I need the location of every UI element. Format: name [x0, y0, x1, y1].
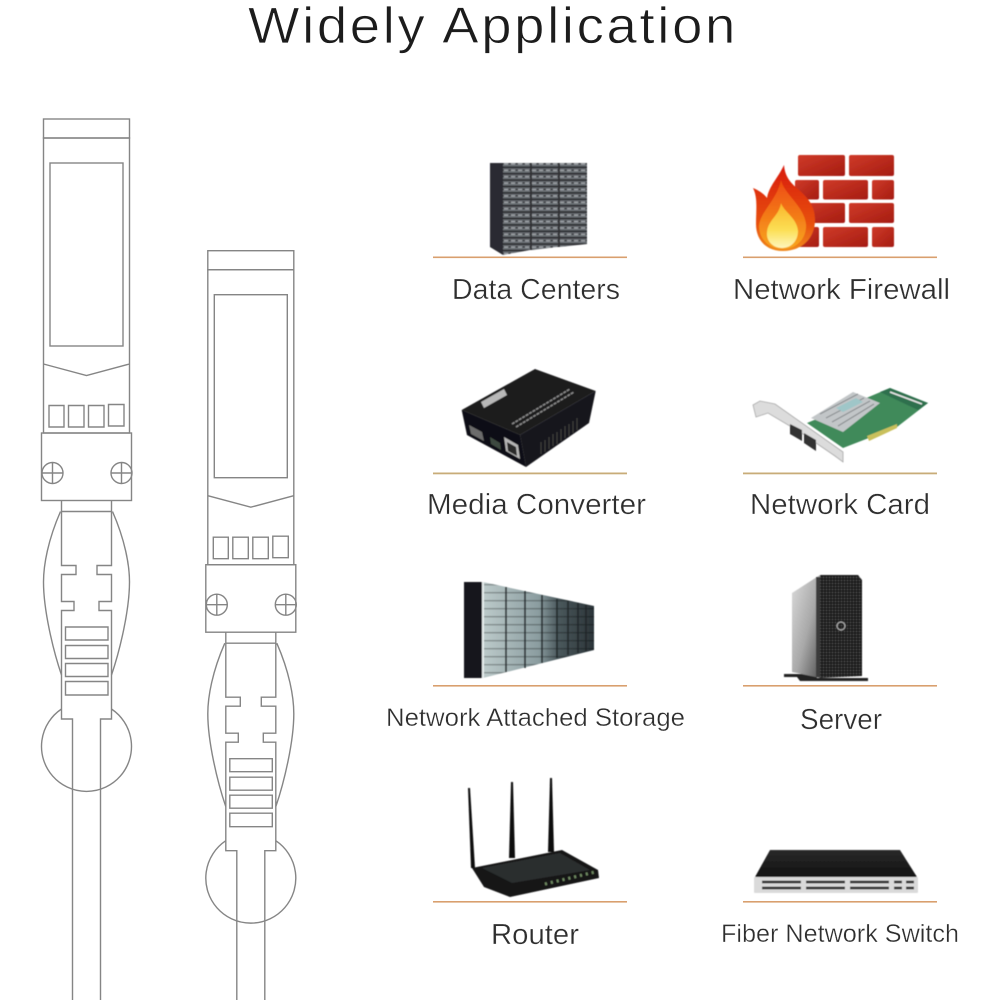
PCB top detail	[880, 388, 928, 410]
latch lens curves	[208, 643, 294, 807]
storage panels	[483, 582, 594, 678]
pull tab outline	[226, 632, 276, 1000]
label: network attached storage: Network Attached Storage	[386, 704, 685, 732]
panel separators	[506, 587, 586, 672]
connector top cap	[208, 251, 294, 270]
racks	[503, 163, 530, 255]
icon: tower server	[784, 575, 868, 681]
chevron	[208, 496, 294, 507]
logo	[837, 622, 845, 630]
screw left	[42, 462, 63, 484]
switch top	[755, 850, 917, 877]
latch bars	[66, 627, 108, 695]
label: router: Router	[491, 919, 579, 951]
divider: data centers	[433, 256, 627, 258]
screw right	[111, 462, 132, 484]
icon: data center racks	[490, 163, 587, 255]
divider: network card	[743, 472, 937, 474]
ports	[790, 424, 802, 441]
bracket	[753, 401, 843, 462]
divider: fiber network switch	[743, 901, 937, 903]
screw right	[275, 594, 296, 615]
PCB	[807, 388, 928, 448]
heatsink	[811, 392, 880, 432]
label: server: Server	[800, 704, 882, 736]
connector window	[50, 163, 123, 346]
mounting block	[42, 433, 132, 500]
side panel	[792, 575, 820, 678]
connector window	[214, 295, 287, 478]
gold fingers	[867, 424, 897, 441]
left face	[462, 410, 526, 467]
screw left	[206, 594, 227, 615]
chevron	[44, 364, 130, 376]
brick wall	[795, 155, 894, 247]
side vents	[541, 418, 577, 454]
strain relief circle	[206, 841, 296, 923]
switch front	[754, 877, 918, 893]
connector body	[208, 270, 294, 565]
feet	[784, 674, 868, 681]
flame middle	[759, 180, 806, 249]
icon: firewall	[753, 155, 894, 251]
contact squares	[49, 404, 124, 427]
label: network firewall: Network Firewall	[733, 274, 950, 306]
antennas	[468, 788, 475, 868]
RJ45 port	[504, 437, 520, 459]
icon: media converter	[462, 369, 596, 467]
router body	[472, 850, 599, 897]
icon: network card	[753, 388, 928, 462]
pull tab outline	[62, 500, 112, 1000]
divider: server	[743, 685, 937, 687]
drive strip	[816, 577, 820, 677]
label: media converter: Media Converter	[427, 489, 646, 521]
top face	[462, 369, 596, 435]
left cable connector line drawing	[42, 119, 132, 1000]
connector body	[44, 138, 130, 433]
right face	[520, 391, 596, 467]
front grille	[820, 575, 862, 678]
latch lens curves	[44, 512, 130, 675]
black end panel	[464, 582, 483, 678]
right cable connector line drawing	[206, 251, 296, 1000]
top print	[512, 389, 574, 427]
flame core	[767, 203, 798, 248]
icon: router	[468, 778, 599, 897]
port rows	[762, 882, 914, 888]
label: network card: Network Card	[750, 489, 930, 521]
divider: router	[433, 901, 627, 903]
divider: media converter	[433, 472, 627, 474]
LEDs	[490, 437, 501, 450]
contact squares	[213, 536, 288, 559]
label: fiber network switch: Fiber Network Switch	[721, 920, 959, 948]
flame	[753, 165, 815, 251]
label: data centers: Data Centers	[452, 274, 620, 306]
brand label	[481, 389, 507, 408]
connector top cap	[44, 119, 130, 138]
icon: fiber network switch	[754, 850, 918, 893]
status LEDs	[545, 872, 595, 884]
latch bars	[230, 759, 272, 827]
mounting block	[206, 565, 296, 632]
icon: network attached storage	[464, 582, 594, 678]
divider: network firewall	[743, 256, 937, 258]
divider: network attached storage	[433, 685, 627, 687]
strain relief circle	[42, 709, 132, 791]
rack side panel	[490, 163, 503, 255]
SFP port	[469, 425, 484, 441]
top sheen	[482, 853, 590, 883]
